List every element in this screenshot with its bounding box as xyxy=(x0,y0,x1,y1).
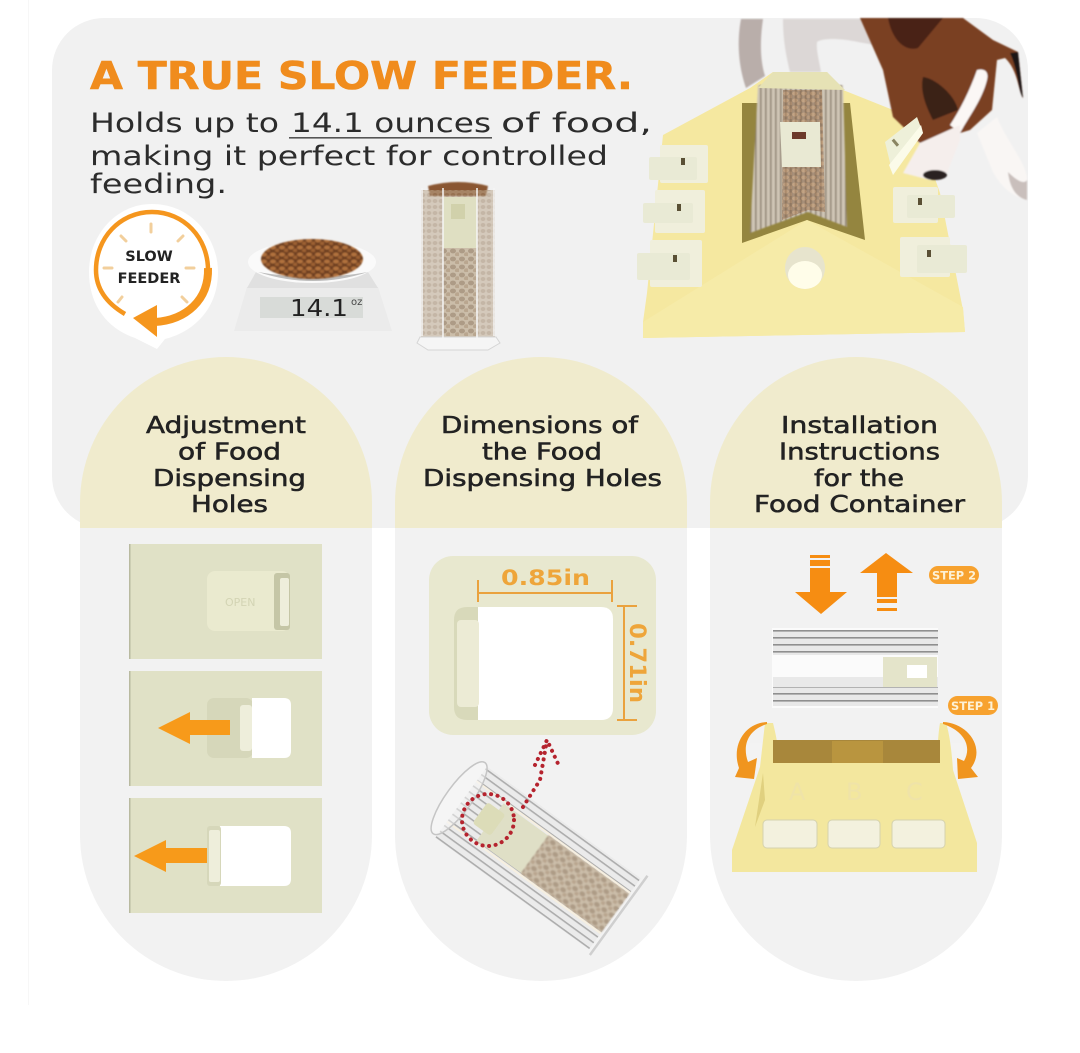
heading: installation xyxy=(754,413,966,518)
icon: kitchen scale with food 14.1 oz: oz xyxy=(351,297,362,308)
label: step 1 xyxy=(948,696,998,715)
tile: half-open dispensing hole with arrow xyxy=(129,671,322,786)
heading: dimensions: Dispensing Holes xyxy=(423,466,662,492)
title: A TRUE SLOW FEEDER. xyxy=(90,54,633,99)
heading: dimensions: the Food xyxy=(482,440,602,466)
text: embossed letters A B C: A xyxy=(789,778,806,806)
heading: dimensions xyxy=(423,413,662,492)
dimension: width 0.85in xyxy=(478,566,612,602)
illustration: angled food container with callout xyxy=(419,740,647,955)
heading: installation: Installation xyxy=(781,413,938,439)
heading: adjustment: of Food xyxy=(178,440,281,466)
heading: installation: for the xyxy=(814,466,904,492)
page edge line xyxy=(28,0,29,1005)
illustration: upright food container xyxy=(417,182,500,350)
text block: capacity description xyxy=(90,108,652,200)
text: embossed letters A B C: B xyxy=(846,778,862,806)
heading: dimensions: Dimensions of xyxy=(441,413,639,439)
illustration: dog legs and body behind feeder xyxy=(739,19,875,88)
heading: adjustment xyxy=(146,413,306,518)
panel: column 2 dimensions of the food dispensing holes xyxy=(395,357,687,981)
sliders: right xyxy=(893,187,967,277)
dimension: height 0.71in xyxy=(617,606,649,720)
heading: adjustment: Holes xyxy=(191,492,268,518)
dimension: height 0.71in: 0.71in xyxy=(624,623,649,703)
illustration: feeder base with rotation arrows xyxy=(732,722,978,872)
badge label: FEEDER xyxy=(118,271,180,287)
text block: capacity description: Holds up to xyxy=(90,108,279,139)
illustration: horizontal food container xyxy=(772,628,938,708)
sliders: left xyxy=(637,145,708,287)
text block: capacity description: feeding. xyxy=(90,169,227,200)
illustration: dog head and front leg xyxy=(860,18,1027,200)
tile: fully open dispensing hole with arrow xyxy=(129,798,322,913)
heading: installation: Instructions xyxy=(779,440,940,466)
arrow: left rotate xyxy=(735,722,767,779)
dimension diagram: hole size xyxy=(429,556,656,735)
arrow: left xyxy=(158,712,230,744)
heading: adjustment: Dispensing xyxy=(153,466,306,492)
icon: up arrow xyxy=(860,553,913,611)
dimension: width 0.85in: 0.85in xyxy=(501,566,590,590)
tile: closed dispensing hole xyxy=(129,544,322,659)
tile: closed dispensing hole: OPEN xyxy=(225,596,255,609)
icon: down arrow xyxy=(795,555,847,614)
label: step 2: STEP 2 xyxy=(932,568,976,582)
heading: installation: Food Container xyxy=(754,492,966,518)
icon: kitchen scale with food 14.1 oz: 14.1 xyxy=(290,296,348,322)
text block: capacity description: of food, xyxy=(501,108,652,139)
callout: dotted circle and arrow xyxy=(462,740,560,846)
panel: column 3 installation instructions xyxy=(710,357,1002,981)
icon: kitchen scale with food 14.1 oz xyxy=(234,239,392,331)
label: step 1: STEP 1 xyxy=(951,699,995,713)
panel: top hero background xyxy=(52,18,1028,528)
knob xyxy=(785,247,825,289)
arrow: right rotate xyxy=(943,722,978,779)
arrow: left xyxy=(134,840,207,872)
slider: pulled out by dog xyxy=(885,117,923,175)
icon: slow feeder badge xyxy=(89,204,218,349)
illustration: slow feeder product xyxy=(637,72,967,338)
text block: capacity description: making it perfect for controlled xyxy=(90,141,608,172)
badge label: SLOW xyxy=(125,249,173,265)
heading: adjustment: Adjustment xyxy=(146,413,306,439)
label: step 2 xyxy=(929,566,979,584)
panel: column 1 adjustment of food dispensing holes xyxy=(80,357,372,981)
text: embossed letters A B C: C xyxy=(906,778,923,806)
text block: capacity description: 14.1 ounces xyxy=(291,108,491,139)
